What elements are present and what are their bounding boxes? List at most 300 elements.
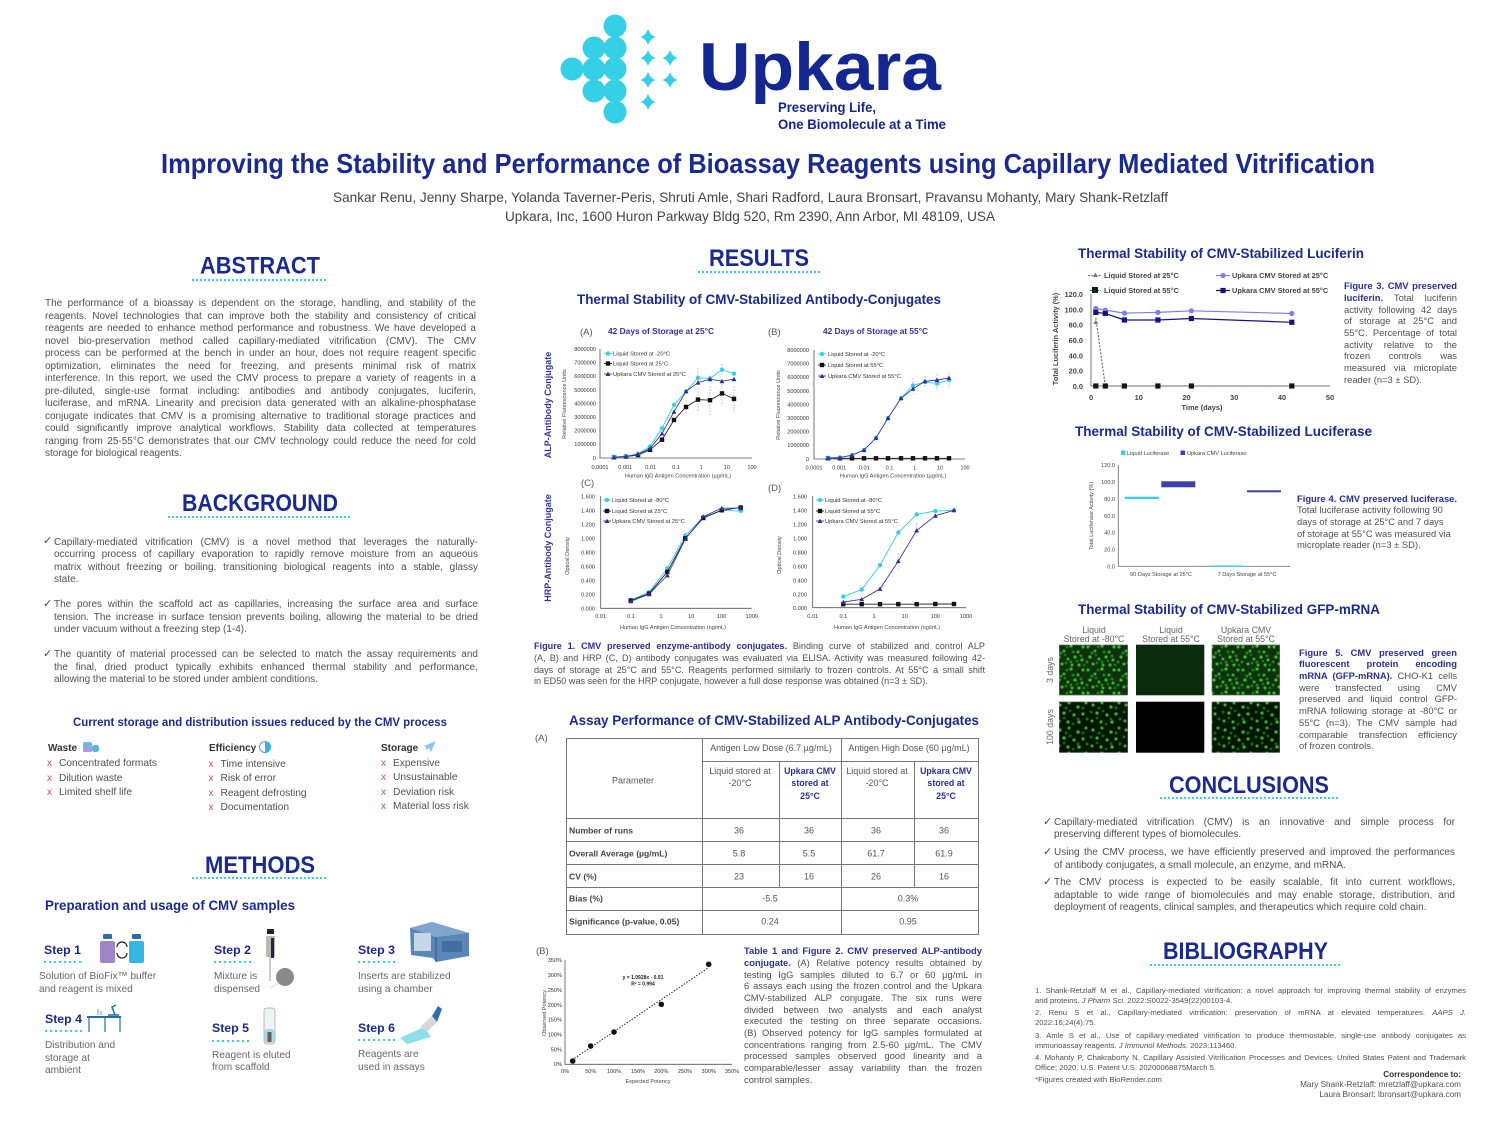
panel label A: (A) — [535, 733, 548, 744]
table: assay performance: 61.7 — [867, 848, 885, 858]
chart A: ALP 25C: 5000000 — [574, 388, 596, 394]
text: bibliography: 2. Renu S et al., Capillary-mediated vitrification: preservation of mRNA at elevated temperatures. AAPS J. — [1035, 1008, 1466, 1017]
text: bibliography: 3. Amle S et al., Use of capillary-mediated vitrification to produce thermostable, single-use antibody conjugates as — [1035, 1031, 1466, 1040]
chart A: ALP 25C: Liquid Stored at 25°C — [613, 362, 668, 368]
text: correspondence — [1300, 1070, 1461, 1099]
chart: observed vs expected potency: y = 1.0928x - 0.01 — [623, 975, 664, 981]
table: assay performance: Number of runs — [569, 826, 633, 836]
text: abstract: novel bio-preservation method called capillary-mediated vitrification (CMV). The CMV — [45, 336, 476, 347]
list: efficiency issues — [208, 759, 307, 813]
chart B: ALP 55C: 0.01 — [859, 466, 870, 472]
chart: luciferin stability: Upkara CMV Stored at 55°C — [1232, 286, 1329, 295]
icon: pipette — [266, 929, 294, 988]
chart C: HRP 25C — [565, 478, 758, 631]
text: conclusion 1: preserving different types of biomolecules. — [1054, 829, 1241, 840]
table: assay performance: 61.9 — [935, 848, 953, 858]
table: assay performance: Antigen Low Dose (6.7 µg/mL) — [710, 743, 832, 753]
list: storage issues — [381, 758, 469, 812]
axis label: HRP: HRP-Antibody Conjugate — [543, 494, 553, 602]
chart D: HRP 55C: Upkara CMV Stored at 55°C — [825, 519, 898, 525]
icon: conclusion check 1: ✓ — [1043, 815, 1052, 828]
micrographs: GFP-mRNA transfection — [1045, 625, 1280, 753]
chart A: ALP 25C: 1000000 — [574, 442, 596, 448]
chart A: ALP 25C: Upkara CMV Stored at 25°C — [613, 372, 686, 378]
chart A: ALP 25C: 8000000 — [574, 347, 596, 353]
text: background point 3 — [54, 649, 478, 685]
chart: luciferin stability: 10 — [1135, 393, 1143, 402]
chart: luciferase stability: 20.0 — [1104, 548, 1115, 554]
list: efficiency issues: Documentation — [220, 802, 289, 813]
chart D: HRP 55C: 100 — [931, 614, 940, 620]
text: background point 3: allowing the material to be stored under ambient conditions. — [54, 674, 318, 685]
caption: figure 4 — [1297, 493, 1457, 550]
list: efficiency issues: x — [208, 788, 214, 799]
tagline — [778, 99, 946, 132]
table: assay performance: -5.5 — [762, 894, 778, 904]
table: assay performance: Overall Average (µg/mL) — [569, 848, 668, 858]
text: bibliography: and proteins. J Pharm Sci. 2022:S0022-3549(22)00103-4. — [1035, 996, 1232, 1005]
list: storage issues: Expensive — [393, 758, 440, 769]
chart A: ALP 25C: 0.0001 — [591, 465, 609, 471]
step 6: Reagents are — [358, 1049, 419, 1060]
chart: observed vs expected potency: 250% — [548, 988, 562, 994]
icon: circle cluster — [560, 14, 626, 124]
chart B: ALP 55C: 7000000 — [787, 362, 809, 368]
step 4: Distribution and — [45, 1040, 115, 1051]
table: assay performance: Upkara CMV — [920, 766, 972, 776]
chart: luciferin stability: 20.0 — [1069, 367, 1083, 376]
chart C: HRP 25C: Human IgG Antigen Concentration (ng/mL) — [620, 625, 726, 631]
text: abstract: conjugate indicates that CMV is a promising alternative to traditional storage practices and — [45, 411, 476, 422]
step 4: Step 4 — [45, 1012, 82, 1026]
chart C: HRP 25C: (C) — [581, 478, 594, 489]
chart D: HRP 55C: Liquid Stored at -80°C — [825, 498, 882, 504]
text: abstract: reagents. Novel technologies that can improve both the stability and consistency of critical — [45, 311, 476, 322]
caption: figure 3: measured via microplate — [1344, 362, 1457, 373]
chart C: HRP 25C: 0.1 — [627, 614, 635, 620]
chart B: ALP 55C: 10 — [937, 466, 943, 472]
list: waste issues: x — [47, 773, 52, 784]
step 6: used in assays — [358, 1062, 425, 1073]
list: storage issues: x — [381, 787, 386, 798]
chart D: HRP 55C: 0.1 — [840, 614, 847, 620]
step 4: storage at — [45, 1053, 90, 1064]
chart: observed vs expected potency: 50% — [585, 1069, 596, 1075]
text: background point 3: The quantity of material processed can be selected to match the assay requirements and — [54, 649, 478, 660]
chart C: HRP 25C: 1.200 — [581, 522, 595, 528]
step 1: Step 1 — [44, 943, 81, 957]
table: assay performance: 16 — [939, 872, 949, 882]
chart: luciferin stability: 100.0 — [1064, 305, 1083, 314]
caption: figure 3: frozen controls was — [1344, 350, 1457, 361]
micrographs: GFP-mRNA transfection: Stored at 55°C — [1142, 634, 1201, 644]
chart B: ALP 55C: 0.0001 — [805, 466, 823, 472]
chart: luciferase stability — [1089, 450, 1290, 578]
list: storage issues: x — [381, 801, 386, 812]
list: efficiency issues: Time intensive — [220, 759, 286, 770]
step 5 — [212, 1008, 291, 1073]
table: assay performance: 36 — [939, 826, 949, 836]
chart B: ALP 55C: 1000000 — [787, 443, 809, 449]
text: background point 3: the final, dried product typically exhibits enhanced thermal stability and performance, — [54, 662, 478, 673]
caption: figure 4: Total luciferase activity following 90 — [1297, 504, 1443, 515]
chart: observed vs expected potency: 0% — [561, 1069, 569, 1075]
chart B: ALP 55C: 4000000 — [787, 402, 809, 408]
table: assay performance: 0.95 — [899, 916, 917, 926]
text: conclusion 2 — [1054, 847, 1455, 871]
caption: figure 3: luciferin. Total luciferin — [1344, 292, 1457, 303]
step 6: Step 6 — [358, 1021, 395, 1035]
chart A: ALP 25C: 42 Days of Storage at 25°C — [608, 326, 714, 336]
chart C: HRP 25C: 1.000 — [581, 536, 595, 542]
step 3: Inserts are stabilized — [358, 971, 451, 982]
caption: figure 1: (A, B) and HRP (C, D) antibody conjugates was evaluated via ELISA. Activity was measured following 42- — [534, 653, 985, 663]
chart: luciferase stability: 120.0 — [1101, 463, 1115, 469]
step 5: Reagent is eluted — [212, 1050, 291, 1061]
table: assay performance: -20°C — [728, 778, 752, 788]
micrographs: GFP-mRNA transfection: 3 days — [1045, 656, 1055, 683]
caption: figure 4: Figure 4. CMV preserved luciferase. — [1297, 493, 1457, 504]
chart A: ALP 25C: 2000000 — [574, 429, 596, 435]
table: assay performance: Antigen High Dose (60 µg/mL) — [848, 743, 970, 753]
chart: luciferase stability: 40.0 — [1104, 530, 1115, 536]
table: assay performance: Liquid stored at — [709, 766, 771, 776]
caption: table 1 and figure 2 — [744, 945, 982, 1085]
table: assay performance: Significance (p-value, 0.05) — [569, 916, 679, 926]
caption: figure 4: microplate reader (n=3 ± SD). — [1297, 539, 1421, 550]
step 1: and reagent is mixed — [39, 984, 133, 995]
chart B: ALP 55C: 6000000 — [787, 375, 809, 381]
chart A: ALP 25C: 0.1 — [672, 465, 680, 471]
list: waste issues: Concentrated formats — [59, 758, 157, 769]
step 1 — [39, 934, 157, 995]
table: assay performance: -20°C — [865, 778, 889, 788]
text: background point 1: state. — [54, 574, 78, 585]
table: assay performance: Parameter — [612, 776, 654, 786]
chart: observed vs expected potency: 300% — [548, 973, 562, 979]
heading: background: BACKGROUND — [182, 490, 338, 517]
chart B: ALP 55C: 1 — [913, 466, 916, 472]
chart C: HRP 25C: 1.400 — [581, 508, 595, 514]
list: efficiency issues: x — [208, 773, 214, 784]
micrographs: GFP-mRNA transfection: Stored at -80°C — [1064, 634, 1125, 644]
chart: observed vs expected potency: 300% — [702, 1069, 716, 1075]
table: assay performance: 25°C — [936, 791, 956, 801]
list: storage issues: x — [381, 758, 386, 769]
heading: bibliography: BIBLIOGRAPHY — [1163, 938, 1328, 965]
caption: table 1 and figure 2: executed the testing on three separate occasions. — [744, 1015, 982, 1026]
chart B: ALP 55C: 3000000 — [787, 416, 809, 422]
chart: luciferin stability: Liquid Stored at 55°C — [1104, 286, 1179, 295]
table: assay performance — [566, 738, 978, 934]
authors and affiliation: Sankar Renu, Jenny Sharpe, Yolanda Taverner-Peris, Shruti Amle, Shari Radford, Laura Bronsart, Pravansu Mohanty, Mary Shank-Retzlaff — [333, 189, 1168, 205]
icon: check 3: ✓ — [43, 646, 52, 660]
icon: check 1: ✓ — [43, 534, 52, 547]
icon: conclusion check 3: ✓ — [1043, 875, 1052, 888]
chart C: HRP 25C: 0.000 — [581, 606, 595, 612]
chart D: HRP 55C: (D) — [768, 483, 781, 494]
text: abstract: luciferase, and mRNA. Linearity and precision data generated with an alkaline-phosphatase — [45, 398, 476, 409]
chart D: HRP 55C: 1.000 — [793, 536, 807, 542]
chart A: ALP 25C: 0.01 — [645, 465, 656, 471]
chart: luciferin stability: Time (days) — [1182, 403, 1223, 412]
chart C: HRP 25C: 0.800 — [581, 550, 595, 556]
text: bibliography — [1035, 986, 1466, 1084]
heading: methods: METHODS — [205, 852, 315, 879]
chart: luciferin stability: 40 — [1278, 393, 1286, 402]
icon: storage plane — [424, 741, 436, 752]
chart: observed vs expected potency: 200% — [654, 1069, 668, 1075]
chart: luciferin stability: 20 — [1182, 393, 1191, 402]
caption: figure 1 — [534, 641, 985, 686]
text: conclusion 2: of antibody conjugates, a small molecule, an enzyme, and mRNA. — [1054, 860, 1346, 871]
icon: tube — [264, 1008, 275, 1044]
chart: luciferin stability: 60.0 — [1069, 336, 1083, 345]
list: waste issues: x — [47, 787, 52, 798]
heading: conclusions: CONCLUSIONS — [1169, 772, 1329, 799]
text: background point 1: Capillary-mediated vitrification (CMV) is a novel method that leverages the naturally- — [54, 537, 478, 548]
chart: observed vs expected potency: 150% — [631, 1069, 645, 1075]
caption: figure 5: fluorescent protein encoding — [1299, 658, 1457, 669]
micrographs: GFP-mRNA transfection: 100 days — [1045, 709, 1055, 745]
chart: observed vs expected potency: 200% — [548, 1003, 562, 1009]
authors and affiliation — [333, 189, 1168, 224]
text: correspondence: Laura Bronsart: lbronsart@upkara.com — [1319, 1090, 1461, 1099]
chart D: HRP 55C: 1.200 — [793, 522, 807, 528]
chart: observed vs expected potency: Expected Potency — [625, 1079, 671, 1085]
table: assay performance: 0.3% — [898, 894, 918, 904]
text: bibliography: 1. Shank-Retzlaff M et al., Capillary-mediated vitrification: a novel approach for improving thermal stability of enzymes — [1035, 986, 1466, 995]
chart A: ALP 25C: Relative Fluorescence Units — [562, 369, 568, 439]
text: conclusion 2: Using the CMV process, we have efficiently preserved and improved the performances — [1054, 847, 1455, 858]
text: bibliography: *Figures created with BioRender.com — [1035, 1075, 1162, 1084]
table: assay performance: 36 — [871, 826, 881, 836]
chart B: ALP 55C: Upkara CMV Stored at 55°C — [828, 374, 901, 380]
chart: luciferin stability: 0.0 — [1073, 382, 1083, 391]
chart B: ALP 55C: (B) — [768, 327, 781, 338]
chart B: ALP 55C: 100 — [960, 466, 970, 472]
caption: figure 3: 55°C. Percentage of total — [1344, 327, 1457, 338]
wordmark: Upkara — [699, 29, 942, 105]
caption: figure 5: comparable transfection efficiency — [1299, 729, 1457, 740]
caption: table 1 and figure 2: 6 assays each using the frozen control and the Upkara — [744, 980, 982, 991]
caption: figure 3: Figure 3. CMV preserved — [1344, 280, 1457, 291]
chart B: ALP 55C: Liquid Stored at -20°C — [828, 352, 885, 358]
chart A: ALP 25C: 1 — [700, 465, 703, 471]
text: background point 2: The pores within the scaffold act as capillaries, increasing the surface area and surface — [54, 599, 478, 610]
table: assay performance: 25°C — [800, 791, 820, 801]
text: abstract: reagents are needed to enhance method performance and robustness. We have developed a — [45, 323, 476, 334]
caption: figure 5: mRNA following storage at -80°C or — [1299, 705, 1457, 716]
caption: figure 4: of storage at 55°C was measured via — [1297, 528, 1451, 539]
icon: chamber — [410, 922, 469, 962]
step 2 — [214, 929, 294, 995]
chart: observed vs expected potency — [536, 946, 739, 1085]
chart B: ALP 55C: 0.001 — [832, 466, 846, 472]
chart C: HRP 25C: 10 — [688, 614, 694, 620]
micrographs: GFP-mRNA transfection: Liquid — [1159, 625, 1183, 635]
chart: luciferase stability: Total Luciferase Activity (%) — [1089, 482, 1095, 550]
chart C: HRP 25C: 0.200 — [581, 592, 595, 598]
text: conclusion 1: Capillary-mediated vitrification (CMV) is an innovative and simple process for — [1054, 817, 1455, 828]
chart A: ALP 25C: Liquid Stored at -20°C — [613, 352, 670, 358]
heading: assay performance: Assay Performance of CMV-Stabilized ALP Antibody-Conjugates — [569, 712, 979, 728]
table: assay performance: 5.8 — [733, 848, 745, 858]
chart: luciferase stability: 100.0 — [1101, 480, 1115, 486]
chart: luciferin stability: 0 — [1089, 393, 1093, 402]
step 5: Step 5 — [212, 1021, 249, 1035]
text: bibliography: immunoassay reagents. J Immunol Methods. 2023:113460. — [1035, 1041, 1237, 1050]
chart: observed vs expected potency: 50% — [551, 1048, 562, 1054]
chart D: HRP 55C: 1.400 — [793, 508, 807, 514]
chart: luciferin stability: Total Luciferin Activity (%) — [1051, 292, 1060, 385]
icon: vials — [100, 934, 144, 963]
caption: table 1 and figure 2: (B) Observed potency for IgG samples formulated at — [744, 1027, 982, 1038]
column headers: waste, efficiency, storage: Efficiency — [209, 743, 257, 754]
chart A: ALP 25C: 4000000 — [574, 401, 596, 407]
chart C: HRP 25C: 1 — [660, 614, 663, 620]
caption: table 1 and figure 2: processed samples observed good linearity and a — [744, 1050, 982, 1061]
text: abstract: pre-diluted, single-use format including: antibodies and antibody conjugates, luciferin, — [45, 386, 476, 397]
chart D: HRP 55C: Optical Density — [777, 536, 783, 574]
icon: efficiency half circle — [260, 742, 270, 752]
chart A: ALP 25C — [562, 326, 757, 480]
logo: Upkara — [560, 14, 946, 132]
chart: luciferase stability: 7 Days Storage at 55°C — [1218, 572, 1276, 578]
icon: conclusion check 2: ✓ — [1043, 845, 1052, 858]
chart: observed vs expected potency: (B) — [536, 946, 549, 957]
text: correspondence: Mary Shank-Retzlaff: mretzlaff@upkara.com — [1300, 1080, 1461, 1089]
heading: abstract: ABSTRACT — [200, 252, 320, 280]
heading: GFP-mRNA: Thermal Stability of CMV-Stabilized GFP-mRNA — [1078, 601, 1380, 617]
chart: luciferin stability: 50 — [1326, 393, 1334, 402]
list: storage issues: x — [381, 772, 386, 783]
heading: storage issues: Current storage and distribution issues reduced by the CMV process — [73, 715, 447, 729]
chart C: HRP 25C: Liquid Stored at 25°C — [612, 509, 667, 515]
chart: luciferase stability: 0.0 — [1107, 564, 1115, 570]
text: abstract: optimization, eliminates the need for freezing, and presents minimal risk of matrix — [45, 361, 476, 372]
table: assay performance: stored at — [927, 778, 965, 788]
list: efficiency issues: x — [208, 802, 214, 813]
chart: luciferin stability: 40.0 — [1069, 351, 1083, 360]
chart: luciferin stability: Upkara CMV Stored at 25°C — [1232, 271, 1329, 280]
caption: table 1 and figure 2: testing IgG samples diluted to 6.7 or 60 µg/mL in — [744, 969, 982, 980]
chart A: ALP 25C: (A) — [580, 327, 593, 338]
chart C: HRP 25C: 0.01 — [595, 614, 606, 620]
caption: table 1 and figure 2: divided between two analysts and each analyst — [744, 1004, 982, 1015]
list: waste issues — [47, 758, 157, 798]
chart D: HRP 55C: 1.600 — [793, 494, 807, 500]
title: Improving the Stability and Performance of Bioassay Reagents using Capillary Mediated Vitrification — [161, 148, 1375, 179]
caption: figure 5: mRNA (GFP-mRNA). CHO-K1 cells — [1299, 670, 1457, 681]
column headers: waste, efficiency, storage: Storage — [381, 743, 419, 754]
micrographs: GFP-mRNA transfection: Liquid — [1082, 625, 1106, 635]
chart D: HRP 55C: 1000 — [960, 614, 972, 620]
table: assay performance: 16 — [804, 872, 814, 882]
text: bibliography: 4. Mohanty P, Chakraborty N. Capillary Assisted Vitrification Processes and Devices. United States Patent and Trademark — [1035, 1053, 1466, 1062]
text: conclusion 3 — [1054, 877, 1455, 913]
chart B: ALP 55C — [768, 326, 970, 480]
step 2: dispensed — [214, 984, 260, 995]
caption: table 1 and figure 2: conjugate. (A) Relative potency results obtained by — [744, 957, 982, 968]
chart A: ALP 25C: 0 — [593, 456, 596, 462]
chart D: HRP 55C: 0.800 — [793, 550, 807, 556]
caption: table 1 and figure 2: concentrations ranging from 2.5-60 µg/mL. The CMV — [744, 1039, 982, 1050]
text: abstract: could significantly improve analytical workflows. Stability data collected at temperatures — [45, 423, 476, 434]
chart B: ALP 55C: 5000000 — [787, 389, 809, 395]
caption: figure 5: of frozen controls. — [1299, 740, 1374, 751]
step 3 — [358, 922, 469, 995]
caption: table 1 and figure 2: control samples. — [744, 1074, 812, 1085]
caption: figure 3: of storage at 25°C and — [1344, 315, 1457, 326]
list: waste issues: x — [47, 758, 52, 769]
icon: waste containers — [83, 742, 99, 752]
text: abstract: The performance of a bioassay is dependent on the storage, handling, and stability of the — [45, 298, 476, 309]
table: assay performance: 26 — [871, 872, 881, 882]
chart A: ALP 25C: 3000000 — [574, 415, 596, 421]
caption: figure 3: activity relative to the — [1344, 339, 1457, 350]
chart: luciferase stability: Upkara CMV Luciferase — [1187, 451, 1246, 457]
column headers: waste, efficiency, storage — [48, 743, 419, 754]
caption: figure 1: Figure 1. CMV preserved enzyme-antibody conjugates. Binding curve of stabilized and control ALP — [534, 641, 985, 651]
chart C: HRP 25C: 1000 — [745, 614, 758, 620]
table: assay performance: 23 — [734, 872, 744, 882]
list: storage issues: Unsustainable — [393, 772, 458, 783]
caption: figure 3 — [1344, 280, 1457, 385]
list: efficiency issues: x — [208, 759, 214, 770]
caption: figure 5: were transfected using CMV — [1299, 682, 1457, 693]
chart B: ALP 55C: 2000000 — [787, 430, 809, 436]
chart B: ALP 55C: Human IgG Antigen Concentration (µg/mL) — [840, 474, 946, 480]
chart D: HRP 55C: Human IgG Antigen Concentration (ng/mL) — [834, 625, 940, 631]
chart: observed vs expected potency: 350% — [725, 1069, 739, 1075]
caption: figure 4: days of storage at 25°C and 7 days — [1297, 516, 1444, 527]
list: waste issues: Limited shelf life — [59, 787, 132, 798]
step 6 — [358, 1006, 442, 1073]
list: storage issues: Material loss risk — [393, 801, 469, 812]
chart B: ALP 55C: 0 — [806, 457, 809, 463]
caption: figure 5: preserved and liquid control GFP- — [1299, 693, 1457, 704]
chart D: HRP 55C — [768, 483, 972, 631]
chart A: ALP 25C: 7000000 — [574, 361, 596, 367]
text: abstract — [45, 298, 476, 459]
table: assay performance: 5.5 — [803, 848, 815, 858]
text: correspondence: Correspondence to: — [1383, 1070, 1461, 1079]
step 1: Solution of BioFix™ buffer — [39, 971, 157, 982]
table: assay performance: stored at — [791, 778, 829, 788]
caption: figure 1: in ED50 was seen for the HRP conjugate, however a full dose response was obtained (n=3 ± SD). — [534, 676, 928, 686]
text: background point 2: under vacuum without a freezing step (1-4). — [54, 624, 247, 635]
chart A: ALP 25C: Human IgG Antigen Concentration (µg/mL) — [625, 474, 731, 480]
caption: table 1 and figure 2: comparable/lesser assay variability than the frozen — [744, 1062, 982, 1073]
chart B: ALP 55C: Liquid Stored at 55°C — [828, 363, 883, 369]
chart: luciferase stability: Liquid Luciferase — [1127, 451, 1169, 457]
micrographs: GFP-mRNA transfection: Upkara CMV — [1221, 625, 1271, 635]
table: assay performance: Bias (%) — [569, 894, 603, 904]
chart D: HRP 55C: Liquid Stored at 55°C — [825, 509, 880, 515]
caption: figure 5 — [1299, 647, 1457, 751]
table: assay performance: 36 — [804, 826, 814, 836]
axis label: ALP: ALP-Antibody Conjugate — [543, 352, 553, 458]
list: efficiency issues: Reagent defrosting — [220, 788, 307, 799]
chart C: HRP 25C: Optical Density — [565, 537, 571, 575]
chart: luciferin stability: Liquid Stored at 25°C — [1104, 271, 1179, 280]
icon: sparkles — [640, 29, 678, 110]
step 2: Mixture is — [214, 971, 257, 982]
icon: check 2: ✓ — [43, 596, 52, 610]
chart: luciferase stability: 60.0 — [1104, 514, 1115, 520]
step 4 — [45, 1005, 121, 1076]
